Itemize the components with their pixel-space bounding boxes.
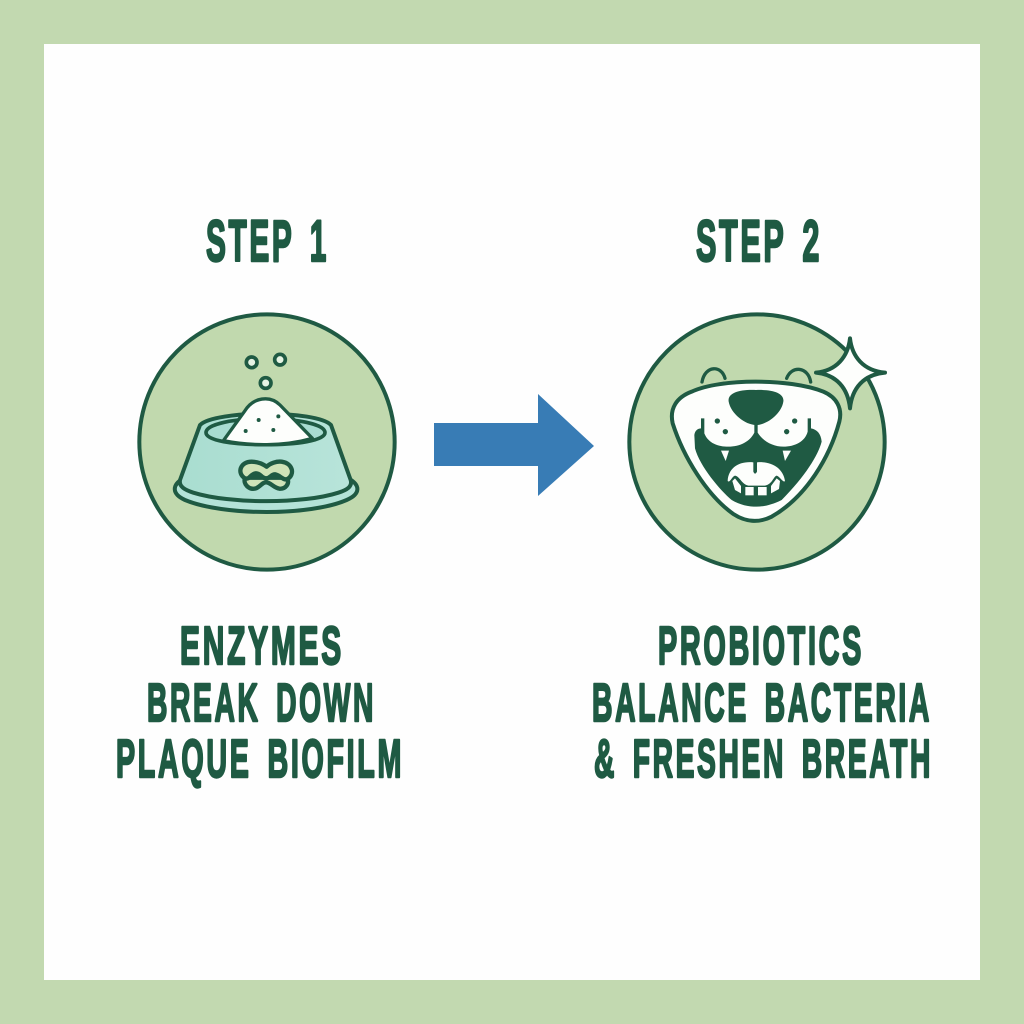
caption: probiotics xyxy=(592,616,933,789)
caption: enzymes: BREAK DOWN xyxy=(147,673,376,733)
heading: step 2: STEP 2 xyxy=(696,209,822,274)
open mouth xyxy=(694,418,822,507)
fangs xyxy=(721,451,791,461)
caption: enzymes: ENZYMES xyxy=(180,616,344,676)
ears xyxy=(702,369,811,382)
nose xyxy=(729,390,783,425)
icon: food bowl with powder in circle xyxy=(139,314,395,570)
muzzle xyxy=(672,382,840,521)
powder mound xyxy=(223,399,312,445)
whisker dots xyxy=(715,418,797,434)
bowl body xyxy=(180,414,351,501)
bowl emblem xyxy=(240,462,292,489)
sparkle xyxy=(816,338,885,408)
bowl opening xyxy=(206,419,325,445)
caption: enzymes: PLAQUE BIOFILM xyxy=(116,729,404,789)
arrow xyxy=(434,394,594,496)
teeth xyxy=(728,462,785,495)
heading: step 1: STEP 1 xyxy=(206,209,329,274)
powder specks xyxy=(244,414,280,433)
icon: smiling dog face with sparkle in circle xyxy=(629,314,885,570)
bowl base rim xyxy=(175,478,357,512)
caption: enzymes xyxy=(116,616,404,789)
bubbles xyxy=(246,354,285,388)
